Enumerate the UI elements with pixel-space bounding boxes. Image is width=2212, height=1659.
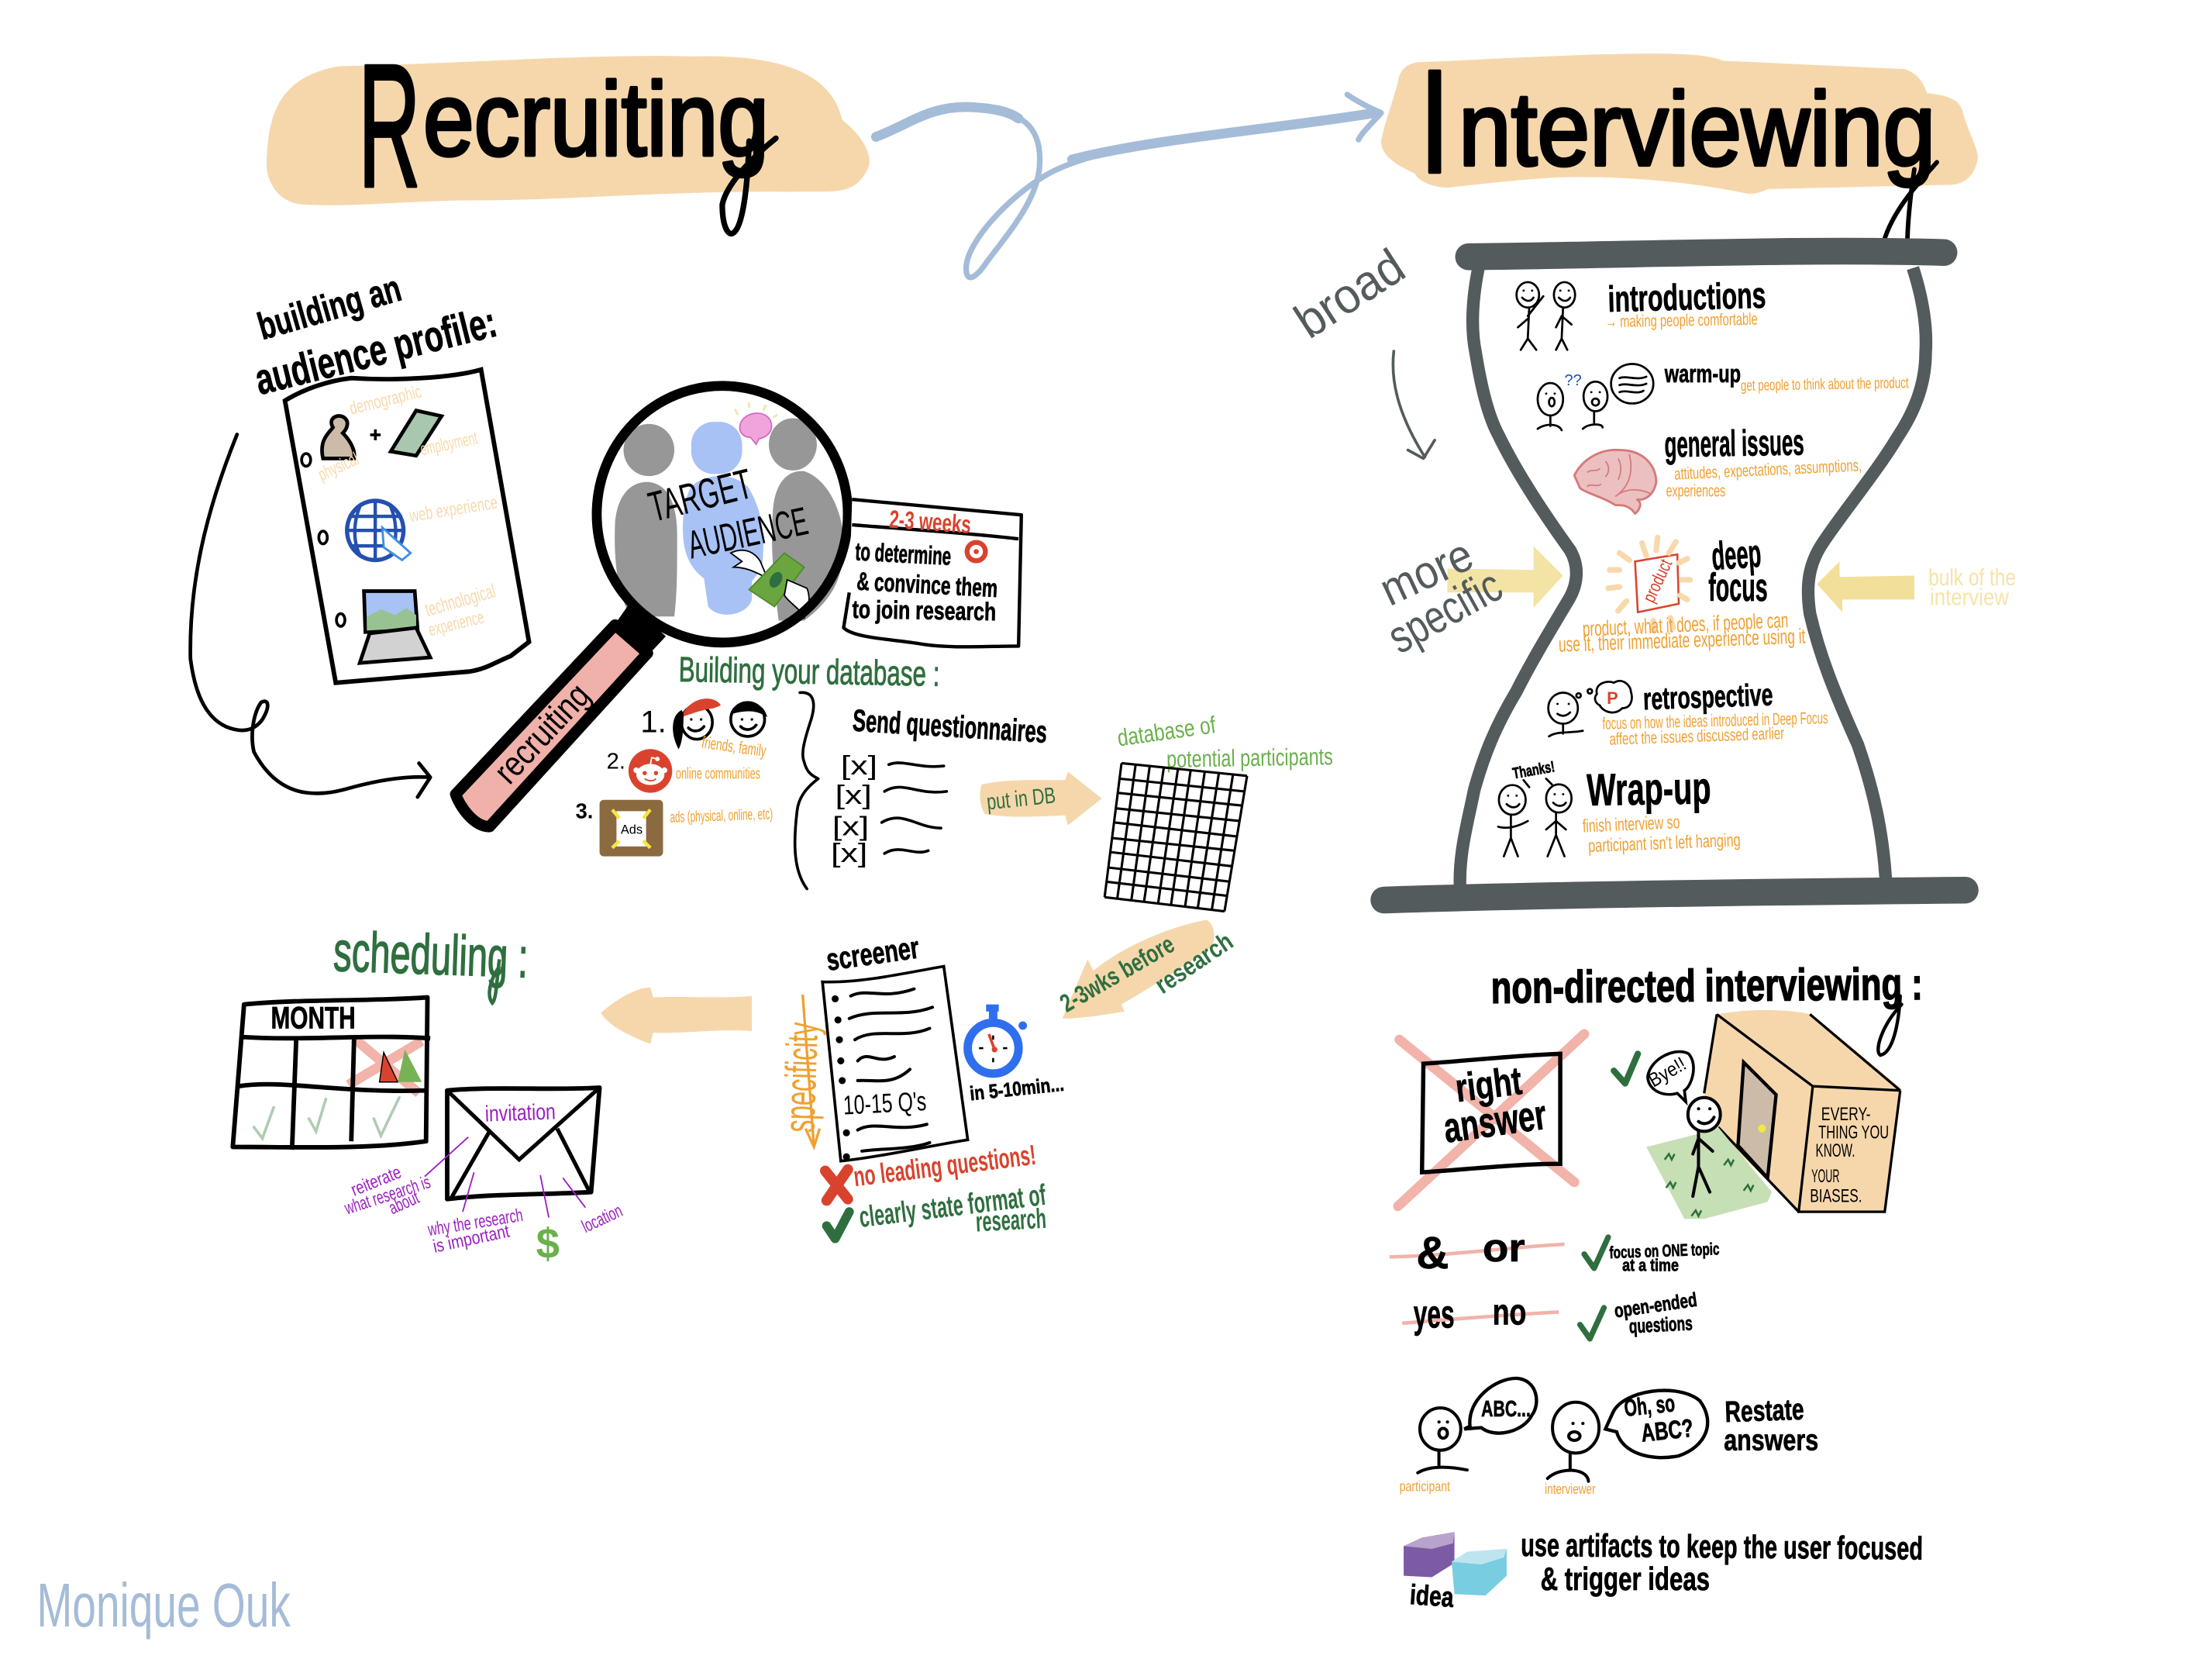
heading: scheduling: scheduling : xyxy=(332,920,529,990)
list: web experience with globe: web experience xyxy=(408,493,499,526)
clearly state format of research: research xyxy=(975,1202,1047,1238)
house of biases: BIASES. xyxy=(1810,1186,1862,1206)
stage: general issues: attitudes, expectations, assumptions, xyxy=(1674,455,1862,484)
clearly state format of research: clearly state format of xyxy=(857,1178,1048,1234)
item 3: ads: ads (physical, online, etc) xyxy=(670,805,774,826)
stage: wrap-up xyxy=(1498,758,1741,857)
handle xyxy=(456,625,647,826)
lens xyxy=(597,386,848,643)
house of biases: KNOW. xyxy=(1816,1141,1855,1161)
stick figure xyxy=(1688,1098,1721,1196)
section: non-directed interviewing xyxy=(1390,959,1923,1613)
audience figures xyxy=(615,419,843,621)
specificity arrow: specificity xyxy=(774,1021,827,1133)
rule: one topic at a time: focus on ONE topic xyxy=(1609,1239,1720,1262)
list: technological experience with laptop xyxy=(336,580,498,663)
participant: ABC... xyxy=(1481,1397,1531,1422)
heading: scheduling xyxy=(332,920,529,1003)
crossed out: right answer: right xyxy=(1453,1058,1524,1110)
invitation notes: what research is xyxy=(342,1172,433,1219)
calendar xyxy=(233,998,430,1150)
item 2: online communities: 2. xyxy=(607,750,625,774)
list: physical and employment xyxy=(301,382,480,485)
participant xyxy=(1400,1378,1536,1494)
rule: use artifacts xyxy=(1404,1526,1923,1613)
item 1: friends and family: 1. xyxy=(640,705,667,739)
rule: open-ended questions: open-ended xyxy=(1613,1289,1698,1323)
participant: participant xyxy=(1400,1478,1450,1494)
database grid: database of xyxy=(1115,711,1218,752)
list: web experience with globe xyxy=(319,493,499,560)
rule: use artifacts: & trigger ideas xyxy=(1541,1561,1710,1597)
label: more specific: specific xyxy=(1379,559,1511,664)
invitation notes: why the research xyxy=(426,1205,525,1240)
invitation notes: $ xyxy=(536,1220,560,1268)
item 3: ads: 3. xyxy=(576,798,593,823)
item 1: friends and family xyxy=(640,698,767,761)
check mark xyxy=(1614,1054,1638,1084)
brace xyxy=(795,692,818,888)
stage: warm-up: get people to think about the product xyxy=(1741,374,1909,395)
house of biases: YOUR xyxy=(1811,1167,1839,1187)
arrow: into deep focus from left xyxy=(1447,546,1563,608)
envelope: invitation: invitation xyxy=(484,1100,556,1127)
invitation notes: location xyxy=(579,1201,625,1237)
specificity arrow xyxy=(774,995,827,1147)
stage: retrospective: P xyxy=(1607,688,1618,708)
rule: open-ended questions: questions xyxy=(1628,1312,1693,1338)
label: bulk of the interview: interview xyxy=(1930,584,2009,611)
house of biases: EVERY- xyxy=(1821,1105,1871,1125)
lens rim xyxy=(597,386,848,643)
no leading questions: no leading questions! xyxy=(852,1139,1038,1192)
rule: one topic at a time xyxy=(1390,1226,1720,1278)
label: bulk of the interview: bulk of the xyxy=(1928,564,2016,591)
interviewer: ABC? xyxy=(1640,1413,1694,1447)
heading: Recruiting xyxy=(267,28,870,233)
list: physical and employment: employment xyxy=(419,429,480,460)
heading: building your database: Building your database : xyxy=(678,650,940,694)
send questionnaires xyxy=(831,704,1048,868)
item 1: friends and family: friends, family xyxy=(701,733,767,761)
send questionnaires: [x] xyxy=(832,812,869,841)
no leading questions xyxy=(825,1139,1038,1201)
item 2: online communities xyxy=(607,749,760,793)
stage: deep focus: product xyxy=(1639,556,1676,605)
arrow: profile to recruiting xyxy=(191,434,430,797)
item 2: online communities: online communities xyxy=(676,765,760,782)
target audience label: TARGET xyxy=(644,460,756,531)
grass xyxy=(1646,1127,1772,1219)
list: technological experience with laptop: technological xyxy=(422,580,498,621)
rule: restate answers xyxy=(1400,1378,1818,1497)
rule: open-ended questions: yes xyxy=(1414,1292,1455,1336)
screener sheet xyxy=(822,967,968,1161)
item 3: ads: Ads xyxy=(621,823,643,836)
callout: 2-3 weeks: & convince them xyxy=(856,567,998,602)
stage: general issues: general issues xyxy=(1664,422,1804,466)
heading: non-directed interviewing: non-directed interviewing : xyxy=(1490,959,1923,1013)
rule: use artifacts: use artifacts to keep the user focused xyxy=(1521,1526,1923,1567)
house of biases xyxy=(1704,1010,1900,1212)
label: bulk of the interview xyxy=(1928,564,2016,611)
interviewer: interviewer xyxy=(1545,1481,1596,1497)
callout: 2-3 weeks xyxy=(843,499,1022,647)
heading: Recruiting: ecruiting xyxy=(423,60,769,178)
stage: deep focus xyxy=(1558,531,1806,657)
crossed out: right answer xyxy=(1398,1034,1584,1206)
section: building your database xyxy=(576,650,1333,912)
list: physical and employment: demographic xyxy=(347,382,424,419)
heading: building an audience profile: building an xyxy=(253,267,406,348)
speech bubble: Bye: Bye!! xyxy=(1645,1053,1690,1092)
arrow: recruiting to interviewing xyxy=(876,95,1381,278)
stage: deep focus: deep xyxy=(1710,531,1762,578)
arrow: into deep focus from right xyxy=(1817,561,1914,612)
label: broad: broad xyxy=(1285,239,1414,349)
send questionnaires: [x] xyxy=(831,839,867,868)
stage: retrospective xyxy=(1549,678,1828,749)
arrow: 2-3 wks before research: 2-3wks before xyxy=(1055,930,1179,1018)
stage: deep focus: focus xyxy=(1708,565,1768,609)
arrow: 2-3 wks before research: research xyxy=(1149,926,1238,999)
neck xyxy=(616,604,666,657)
item 3: ads xyxy=(576,798,774,857)
section: scheduling xyxy=(233,920,625,1268)
stage: wrap-up: Wrap-up xyxy=(1587,763,1711,816)
stage: deep focus: product, what it does, if people can xyxy=(1582,608,1789,641)
handle label: recruiting xyxy=(486,675,598,791)
label: more specific: more xyxy=(1372,528,1481,616)
arrow: put in DB: put in DB xyxy=(985,783,1057,815)
stage: retrospective: retrospective xyxy=(1642,678,1773,716)
stage: retrospective: affect the issues discussed earlier xyxy=(1609,723,1785,749)
send questionnaires: [x] xyxy=(841,751,877,781)
stage: wrap-up: finish interview so xyxy=(1582,812,1680,837)
icon: winged money xyxy=(731,550,809,618)
rule: one topic at a time: or xyxy=(1483,1226,1525,1270)
icon: stopwatch xyxy=(968,1005,1027,1074)
signature: Monique Ouk xyxy=(36,1571,291,1640)
section: building an audience profile xyxy=(191,267,529,797)
arrow: to scheduling xyxy=(601,988,752,1044)
target audience label xyxy=(644,460,811,567)
heading: Interviewing xyxy=(1381,40,1978,248)
heading: building an audience profile: audience profile: xyxy=(250,297,501,404)
heading: Interviewing: I xyxy=(1419,40,1450,204)
rule: restate answers: answers xyxy=(1724,1424,1818,1457)
invitation notes xyxy=(342,1137,625,1268)
icon: pink brain xyxy=(735,402,777,444)
stage: introductions: introductions xyxy=(1607,275,1766,320)
stage: introductions xyxy=(1517,275,1766,350)
hourglass sides xyxy=(1460,268,1926,888)
rule: open-ended questions: no xyxy=(1493,1292,1526,1333)
stage: introductions: → making people comfortable xyxy=(1605,309,1758,331)
invitation notes: reiterate xyxy=(348,1162,405,1201)
rule: use artifacts: idea xyxy=(1409,1578,1456,1613)
stage: warm-up xyxy=(1538,359,1909,430)
crossed out: right answer: answer xyxy=(1441,1091,1549,1152)
section: screener xyxy=(774,931,1065,1239)
list: technological experience with laptop: experience xyxy=(426,608,486,641)
hourglass funnel xyxy=(1384,251,1965,900)
arrow: broad to specific xyxy=(1393,351,1435,458)
rule: one topic at a time: at a time xyxy=(1622,1256,1679,1275)
stage: general issues: experiences xyxy=(1666,481,1725,501)
heading: building an audience profile xyxy=(250,267,501,404)
database grid xyxy=(1104,711,1333,912)
invitation notes: about xyxy=(386,1188,422,1219)
rule: one topic at a time: & xyxy=(1416,1228,1449,1278)
stage: warm-up: warm-up xyxy=(1664,359,1741,388)
stage: wrap-up: Thanks! xyxy=(1511,758,1556,782)
callout: 2-3 weeks: 2-3 weeks xyxy=(888,505,972,539)
list: physical and employment: + xyxy=(370,425,381,447)
screener heading: screener xyxy=(825,931,922,978)
heading: non-directed interviewing xyxy=(1490,959,1923,1055)
heading: Recruiting: R xyxy=(358,28,420,223)
stage: deep focus: use it, their immediate experience using it xyxy=(1558,624,1806,657)
interviewer xyxy=(1545,1389,1707,1497)
stage: wrap-up: participant isn't left hanging xyxy=(1588,830,1741,857)
stage: warm-up: ?? xyxy=(1565,372,1582,389)
panel: profile sheet xyxy=(285,370,529,683)
arrow: put in DB xyxy=(980,771,1102,826)
envelope: invitation xyxy=(447,1088,600,1199)
send questionnaires: [x] xyxy=(836,781,872,810)
rule: restate answers: Restate xyxy=(1724,1393,1804,1429)
invitation notes: is important xyxy=(431,1221,512,1257)
icon: artifact blocks xyxy=(1404,1532,1507,1595)
interviewer: Oh, so xyxy=(1623,1389,1676,1422)
stage: retrospective: focus on how the ideas introduced in Deep Focus xyxy=(1602,708,1828,733)
clearly state format of research xyxy=(827,1178,1048,1239)
time label: in 5-10min... xyxy=(969,1074,1065,1105)
list: physical and employment: physical xyxy=(315,449,362,485)
hourglass bottom bar xyxy=(1384,890,1965,900)
scene: walking out of the house xyxy=(1645,1010,1900,1219)
screener question list xyxy=(836,989,932,1157)
hourglass top bar xyxy=(1469,251,1944,257)
calendar: MONTH xyxy=(270,1002,356,1036)
stage: general issues xyxy=(1574,422,1862,513)
database grid: potential participants xyxy=(1166,743,1333,773)
callout: 2-3 weeks: to join research xyxy=(852,595,997,626)
callout: 2-3 weeks: to determine xyxy=(855,536,952,571)
magnifying glass: target audience xyxy=(456,386,848,826)
heading: Interviewing: nterviewing xyxy=(1459,71,1935,188)
house of biases: THING YOU xyxy=(1818,1123,1889,1143)
send questionnaires: Send questionnaires xyxy=(852,704,1048,750)
target audience label: AUDIENCE xyxy=(684,498,811,567)
screener question list: 10-15 Q's xyxy=(842,1087,927,1121)
rule: open-ended questions xyxy=(1402,1289,1698,1339)
